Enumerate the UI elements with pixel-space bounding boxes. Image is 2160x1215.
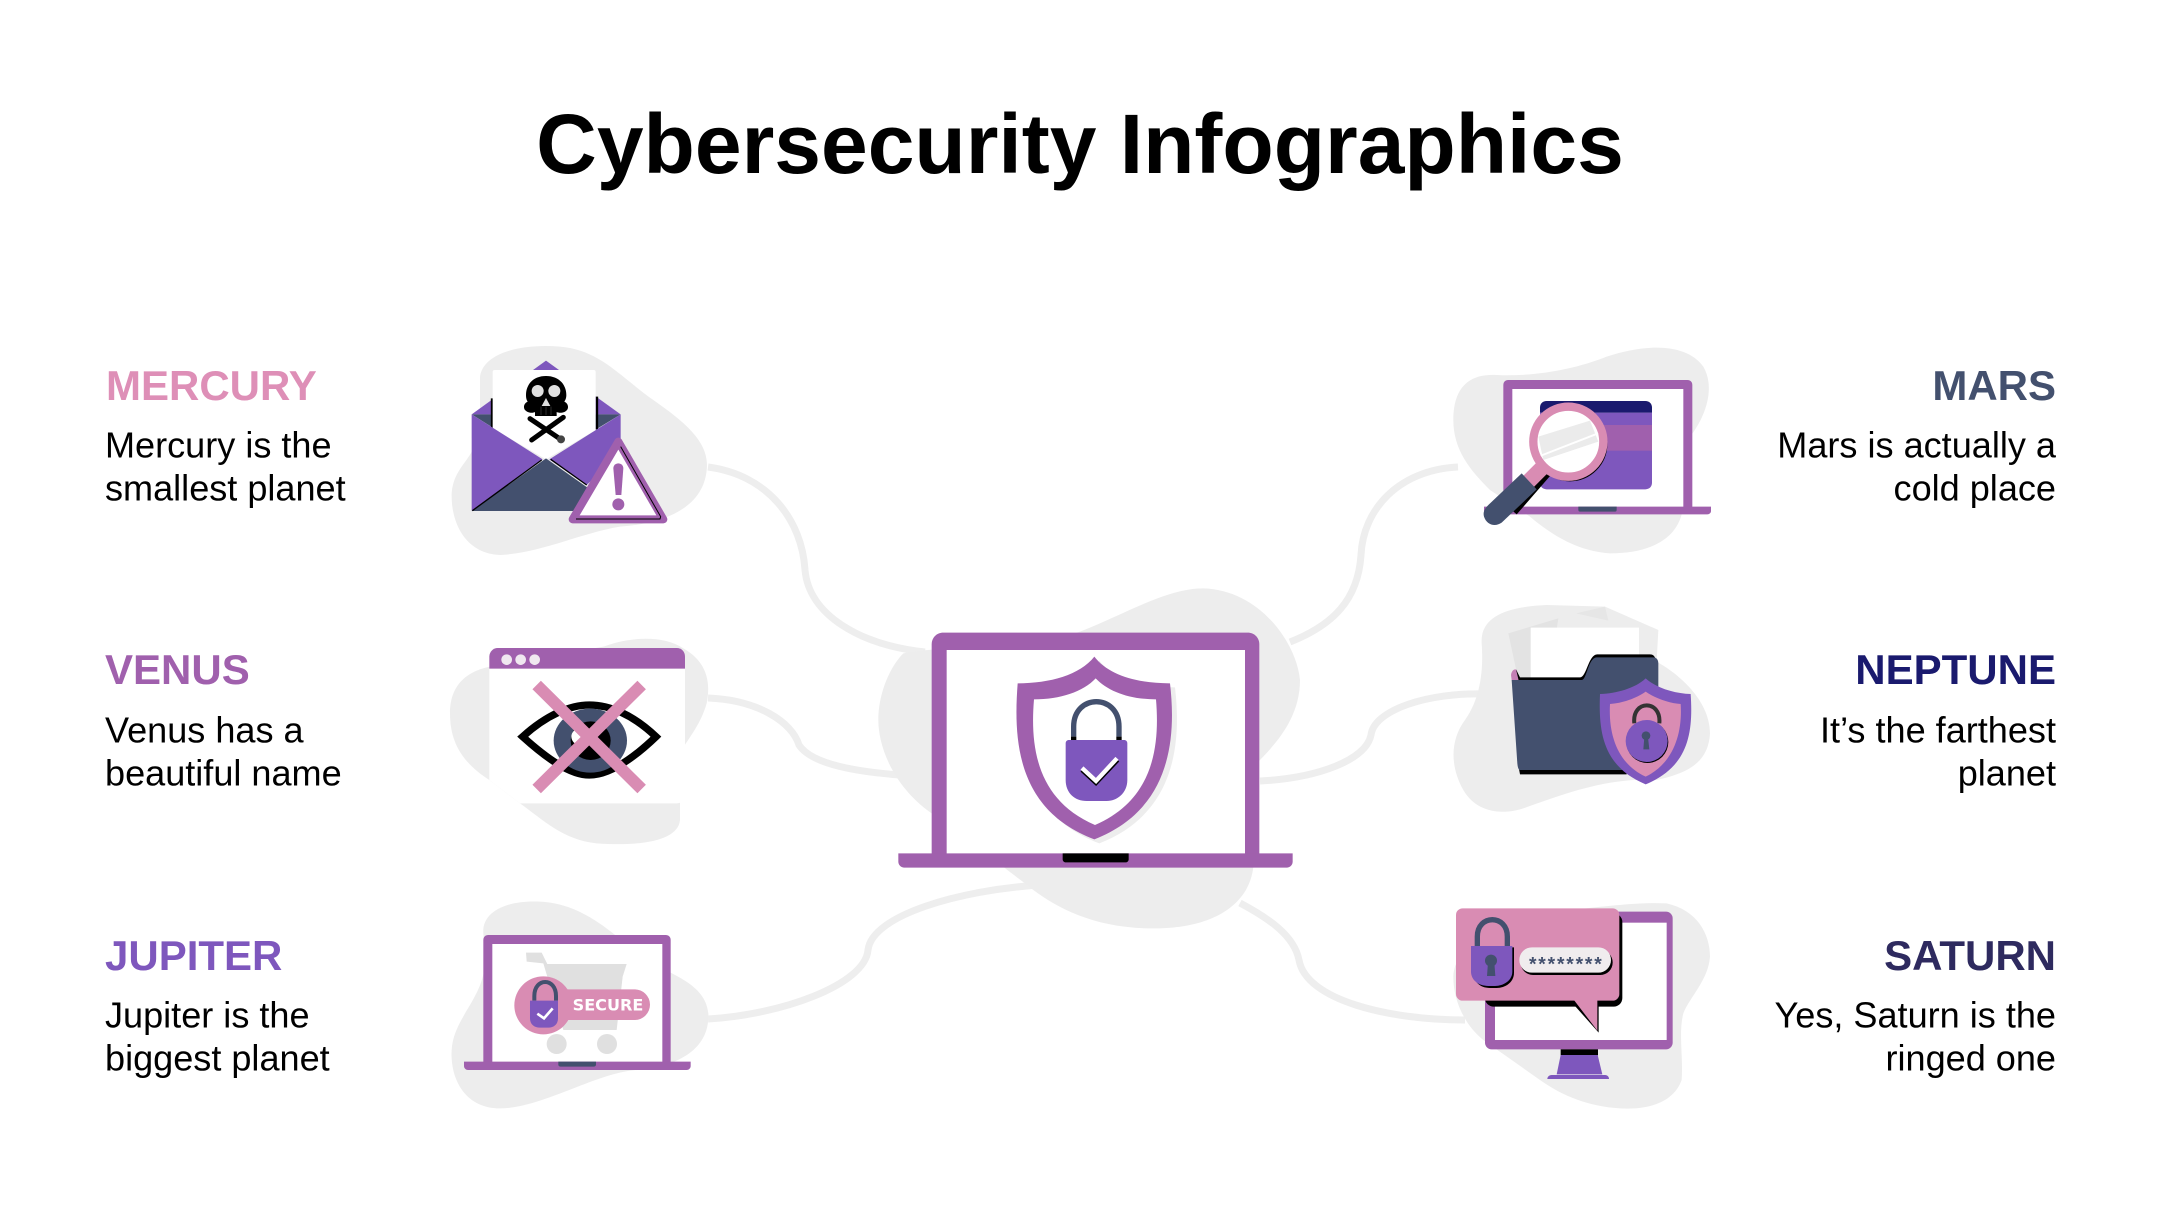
- left column text: Venus: Venus has a: [105, 710, 305, 750]
- left column text: Mercury: [105, 362, 346, 509]
- left column text: Jupiter: JUPITER: [105, 932, 282, 979]
- left column text: Mercury: MERCURY: [106, 362, 317, 409]
- right column text: Saturn: SATURN: [1884, 932, 2056, 979]
- monitor: [1485, 912, 1673, 1079]
- right column text: Neptune: It’s the farthest: [1820, 710, 2056, 750]
- folder: [1511, 654, 1658, 774]
- left column text: Jupiter: [105, 932, 330, 1078]
- eye: [523, 705, 656, 775]
- right column text: Saturn: Yes, Saturn is the: [1775, 994, 2056, 1036]
- right column text: Saturn: ringed one: [1885, 1038, 2056, 1078]
- letter with skull: [493, 370, 596, 459]
- papers: [1508, 607, 1639, 680]
- speech bubble: [1456, 908, 1622, 1033]
- shield: [1016, 657, 1177, 843]
- central laptop with shield: [878, 588, 1300, 928]
- icon: laptop with secure shopping cart: [452, 902, 708, 1108]
- icon: laptop with magnifier over card: [1453, 348, 1711, 553]
- password field: ********: [1529, 954, 1604, 975]
- secure badge: SECURE: [573, 996, 643, 1015]
- right column text: Neptune: planet: [1958, 752, 2056, 794]
- magnifying glass: [1484, 407, 1605, 525]
- left column text: Mercury: Mercury is the: [105, 425, 332, 466]
- left column text: Venus: beautiful name: [105, 752, 342, 794]
- title: Cybersecurity Infographics: [536, 97, 1624, 191]
- card on screen: [1540, 401, 1652, 489]
- right column text: Mars: [1777, 362, 2057, 509]
- connector lines: [708, 467, 1486, 1020]
- right column text: Neptune: NEPTUNE: [1855, 646, 2056, 693]
- password field: [1519, 947, 1613, 975]
- padlock: [1066, 702, 1127, 801]
- icon: browser window with crossed out eye: [450, 639, 708, 844]
- right column text: Mars: MARS: [1932, 362, 2056, 409]
- icon: folder with shield lock: [1454, 605, 1710, 812]
- icon: phishing email with skull and warning: [452, 346, 707, 555]
- right column text: Saturn: [1775, 932, 2056, 1078]
- right column text: Mars: Mars is actually a: [1777, 425, 2057, 466]
- left column text: Mercury: smallest planet: [105, 468, 346, 509]
- right column text: Neptune: [1820, 646, 2056, 794]
- warning triangle: [573, 442, 663, 519]
- padlock: [1471, 920, 1514, 988]
- left column text: Jupiter: Jupiter is the: [105, 994, 310, 1036]
- left column text: Jupiter: biggest planet: [105, 1038, 330, 1078]
- left column text: Venus: [105, 646, 342, 794]
- shield lock: [1600, 678, 1691, 784]
- icon: monitor with password bubble: [1453, 903, 1710, 1109]
- left column text: Venus: VENUS: [105, 646, 250, 693]
- shopping cart: [526, 953, 627, 1054]
- right column text: Mars: cold place: [1894, 468, 2056, 509]
- secure badge: [514, 976, 650, 1034]
